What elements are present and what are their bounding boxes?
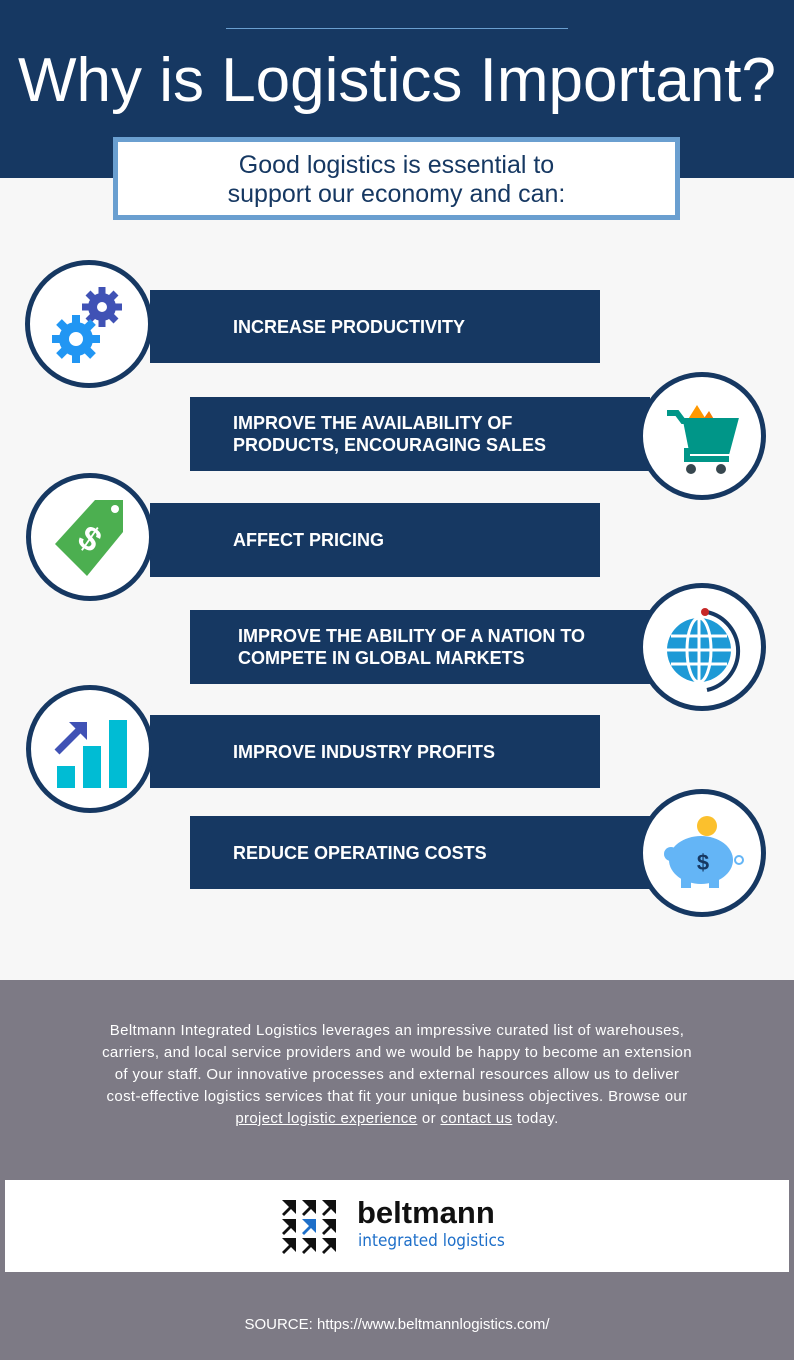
title: Why is Logistics Important? (18, 46, 776, 115)
row 1 bar (150, 290, 600, 363)
subtitle box: support our economy and can: (228, 180, 565, 208)
row 4 bar: IMPROVE THE ABILITY OF A NATION TO (238, 626, 585, 646)
row 3 bar: AFFECT PRICING (233, 530, 384, 550)
logo: integrated logistics (358, 1231, 505, 1251)
row 3 bar (150, 503, 600, 577)
icon: price tag: $ (71, 518, 108, 560)
source line: SOURCE: https://www.beltmannlogistics.com/ (244, 1316, 550, 1333)
row 2 bar (190, 397, 650, 471)
icon: price tag (26, 473, 154, 601)
icon: growth chart (26, 685, 154, 813)
row 6 bar: REDUCE OPERATING COSTS (233, 842, 487, 862)
icon: piggy bank (638, 789, 766, 917)
footer text block: Beltmann Integrated Logistics leverages an impressive curated list of warehouses, carriers, and local service providers and we would be happy to become an extension of your staff. Our innovative processes and external resources allow us to deliver cost-effective logistics services that fit your unique business objectives. Browse our project logistic experience or contact us today. (102, 1022, 692, 1127)
subtitle box: Good logistics is essential to (239, 151, 554, 179)
subtitle box (113, 137, 680, 220)
row 4 bar (190, 610, 650, 684)
icon: gears (25, 260, 153, 388)
row 6 bar (190, 816, 650, 889)
icon: globe (638, 583, 766, 711)
row 5 bar: IMPROVE INDUSTRY PROFITS (233, 742, 495, 762)
icon: piggy bank: $ (697, 850, 709, 875)
row 2 bar: IMPROVE THE AVAILABILITY OF (233, 413, 512, 433)
logo band (0, 1160, 794, 1290)
row 1 bar: INCREASE PRODUCTIVITY (233, 316, 465, 336)
header band (0, 0, 794, 178)
footer text block (0, 980, 794, 1160)
icon: cart (638, 372, 766, 500)
row 5 bar (150, 715, 600, 788)
row 4 bar: COMPETE IN GLOBAL MARKETS (238, 648, 525, 668)
row 2 bar: PRODUCTS, ENCOURAGING SALES (233, 435, 546, 455)
source line (0, 1290, 794, 1360)
logo (282, 1195, 505, 1254)
logo: beltmann (357, 1195, 495, 1230)
